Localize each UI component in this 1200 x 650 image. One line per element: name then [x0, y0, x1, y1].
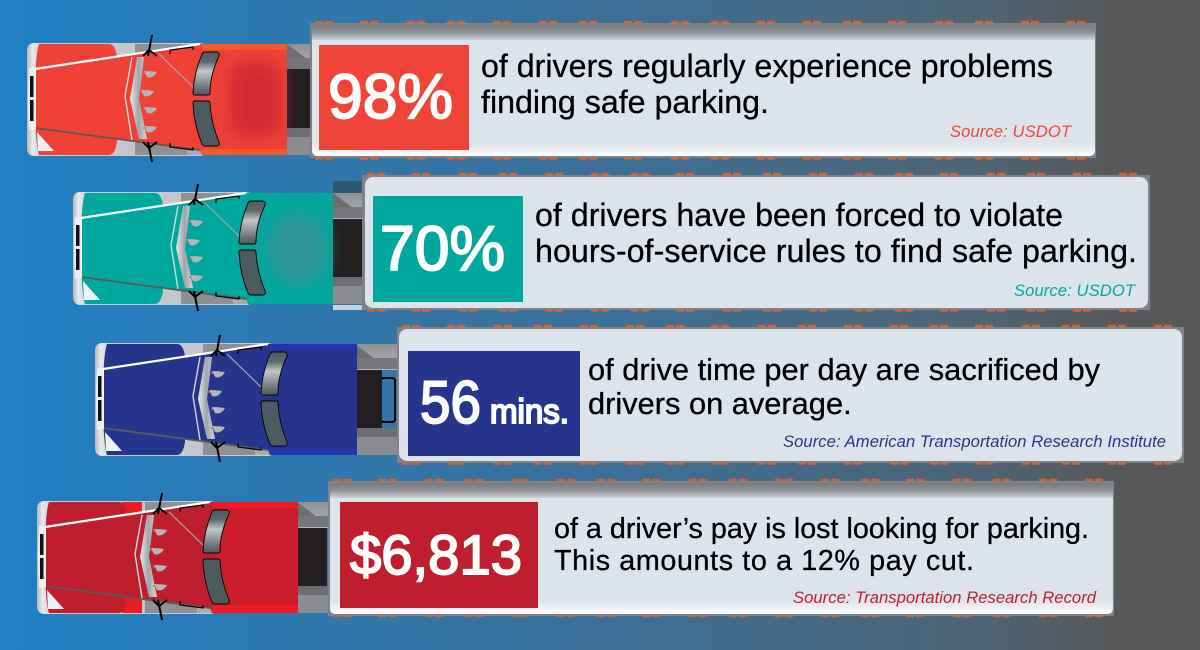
panel: 70% of drivers: [362, 174, 1150, 310]
source: Source: American Transportation Research Institute: [783, 432, 1166, 451]
stat number: 98%: [328, 62, 453, 132]
source: Source: USDOT: [950, 122, 1073, 141]
statement text: of drivers regularly experience problems: [481, 48, 1053, 84]
stat box: [373, 196, 523, 302]
statement text: drivers on average.: [588, 386, 852, 421]
stat box: [319, 45, 469, 150]
trailer body: [328, 481, 1114, 616]
panel: $6,813: [328, 480, 1114, 616]
truck 2: teal cab: [73, 181, 381, 311]
stat number: 56: [420, 369, 481, 436]
panel: 56 mins.: [397, 326, 1184, 464]
trailer body: [310, 23, 1096, 158]
statement text: of drive time per day are sacrificed by: [588, 352, 1101, 387]
dark upper trailer edge: [333, 181, 368, 193]
statement text: finding safe parking.: [481, 84, 769, 120]
statement text: [554, 513, 1089, 577]
marker lights: [315, 22, 1090, 158]
stat box: [340, 502, 538, 608]
marker lights: [402, 326, 1177, 464]
stat number: 70%: [380, 214, 505, 284]
black rear deck: [357, 370, 382, 428]
trailer body: [397, 327, 1184, 463]
panel: 98% of drivers: [310, 22, 1096, 158]
stat number: [420, 369, 569, 436]
stat box: [408, 351, 580, 456]
trailer body: [362, 175, 1150, 310]
statement text: of drivers have been forced to violate: [535, 197, 1063, 233]
black rear deck: [287, 69, 317, 128]
source: Source: USDOT: [1014, 281, 1137, 300]
truck 3: blue cab: [95, 335, 403, 462]
truck 4: crimson cab: [37, 493, 345, 620]
rear window frame: [381, 378, 395, 422]
black rear deck: [297, 528, 327, 586]
statement text: This amounts to a 12% pay cut.: [554, 545, 974, 577]
statement text: [588, 352, 1101, 421]
stat number: $6,813: [350, 523, 522, 586]
statement text: [481, 48, 1053, 120]
stat number: mins.: [490, 393, 569, 431]
truck 1: red-orange cab: [27, 35, 335, 162]
statement text: hours-of-service rules to find safe parking.: [535, 233, 1137, 269]
marker lights: [367, 174, 1142, 310]
black rear deck: [333, 219, 363, 277]
statement text: of a driver’s pay is lost looking for parking.: [554, 513, 1089, 545]
marker lights: [333, 480, 1108, 616]
statement text: [535, 197, 1137, 269]
source: Source: Transportation Research Record: [793, 588, 1097, 607]
